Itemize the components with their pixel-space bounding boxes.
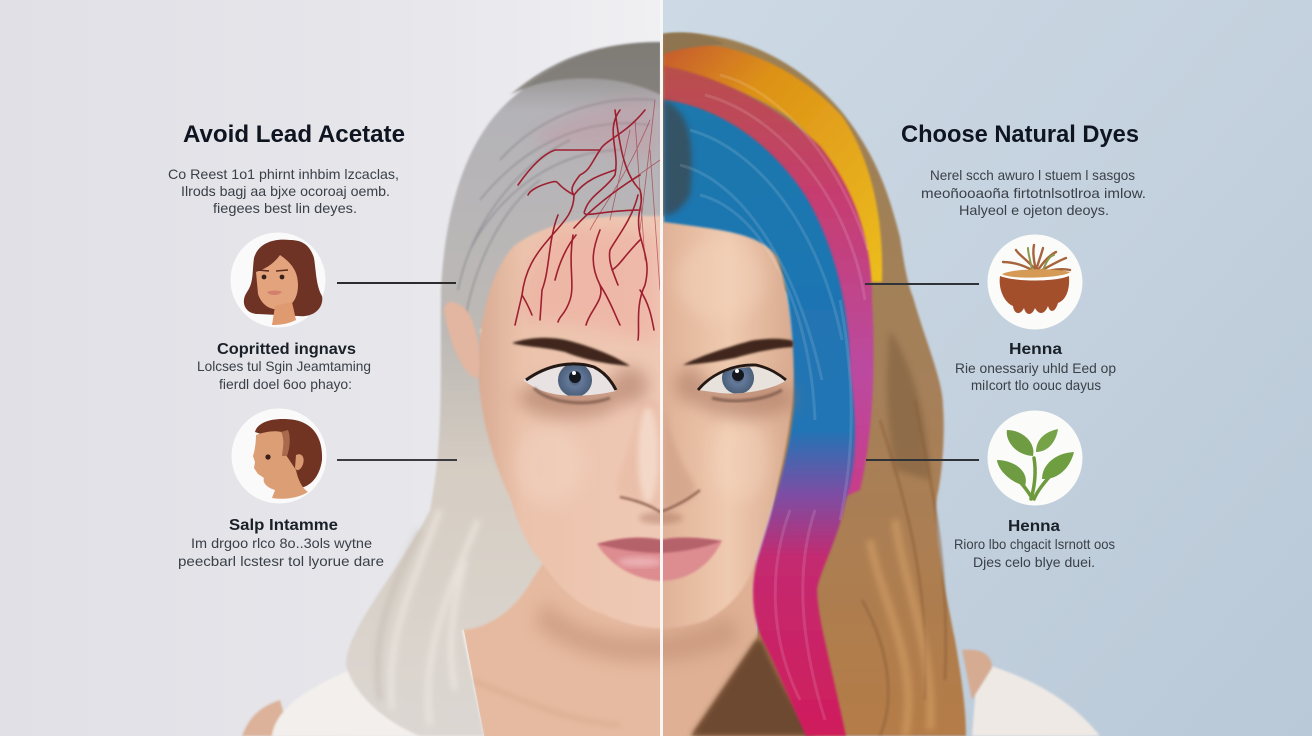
panel: right background [661, 0, 1312, 736]
lips [597, 538, 722, 581]
item: copritted ingnavs [197, 341, 371, 392]
item: henna 2: Henna [1008, 518, 1060, 535]
panel: left background [0, 0, 661, 736]
item: henna 1: miIcort tlo oouc dayus [971, 377, 1101, 393]
intro text left: fiegees best lin deyes. [213, 200, 357, 216]
intro text right: Nerel scch awuro l stuem l sasgos [930, 167, 1135, 183]
intro text right: meoñooaoña firtotnlsotlroa imlow. [921, 185, 1146, 201]
white top [242, 620, 1100, 736]
brown top of right hair [664, 33, 725, 54]
red vein network [515, 100, 660, 340]
portrait: split face [242, 33, 1100, 736]
left eye [523, 363, 616, 403]
eyebrows [512, 338, 793, 366]
heading: choose natural dyes: Choose Natural Dyes [901, 121, 1139, 148]
item: copritted ingnavs: fierdl doel 6oo phayo: [219, 376, 352, 392]
right colored hair: pink band [664, 66, 874, 500]
intro text left: Ilrods bagj aa bjxe ocoroaj oemb. [181, 183, 390, 199]
intro text right: Halyeol e ojeton deoys. [959, 202, 1109, 218]
hair root shadow at the right parting [664, 100, 692, 216]
icon: henna bowl with plant [988, 234, 1082, 330]
red tint on grey hair [530, 99, 655, 160]
intro text left: Co Reest 1o1 phirnt inhbim lzcaclas, [168, 166, 399, 182]
heading: avoid lead acetate: Avoid Lead Acetate [183, 121, 405, 148]
panel: avoid lead acetate (left column) [168, 121, 457, 569]
right colored hair: yellow band [664, 44, 882, 282]
icon: woman front face [230, 232, 326, 328]
connector line 1 [337, 282, 456, 284]
panel: choose natural dyes (right column) [865, 121, 1146, 570]
intro text left [168, 166, 399, 216]
connector line 3 [865, 283, 979, 285]
eye socket shadows [518, 367, 795, 418]
right hair: brown base [661, 33, 966, 736]
left hair: grey and bleached [346, 42, 661, 736]
item: salp intamme [178, 517, 384, 569]
nose [617, 400, 700, 524]
item: henna 1: Rie onessariy uhld Eed op [955, 360, 1116, 376]
item: copritted ingnavs: Lolcses tul Sgin Jeamtaming [197, 358, 371, 374]
item: henna 1: Henna [1009, 341, 1062, 358]
item: henna 1 [955, 341, 1116, 393]
item: henna 2: Djes celo blye duei. [973, 554, 1095, 570]
center divider line [660, 0, 663, 736]
dark brown hair beside neck [691, 640, 815, 736]
connector line 4 [866, 459, 979, 461]
icon: side profile head [232, 408, 326, 504]
item: henna 2: Rioro lbo chgacit lsrnott oos [954, 536, 1115, 552]
neck and chest [462, 540, 756, 736]
item: salp intamme: peecbarl lcstesr tol lyorue dare [178, 553, 384, 569]
item: salp intamme: Salp Intamme [229, 517, 338, 534]
item: henna 2 [954, 518, 1115, 570]
left ear [444, 302, 480, 378]
icon: green leaves [988, 410, 1082, 506]
connector line 2 [337, 459, 457, 461]
intro text right [921, 167, 1146, 218]
face skin [478, 216, 795, 628]
right colored hair: blue to magenta lock [664, 100, 855, 736]
right eye [698, 362, 787, 401]
item: salp intamme: Im drgoo rlco 8o..3ols wytne [191, 535, 372, 551]
item: copritted ingnavs: Copritted ingnavs [217, 341, 356, 358]
colored hair strands [680, 75, 868, 720]
